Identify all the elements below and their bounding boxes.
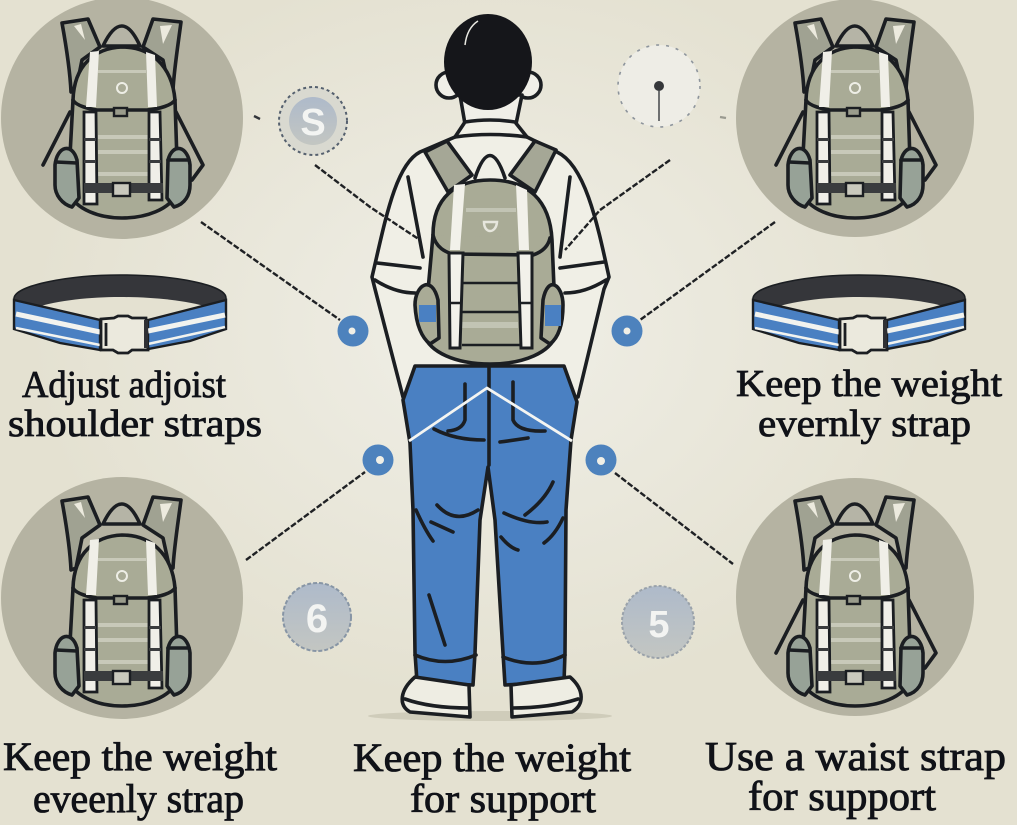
- marker: upper left dot: [338, 316, 368, 346]
- connector: bottom left: [246, 472, 365, 560]
- text: use a waist strap: [705, 733, 1006, 819]
- connector: dial to pack: [565, 160, 670, 250]
- text: adjust shoulder straps: shoulder straps: [8, 403, 262, 445]
- badge: 5: [622, 586, 694, 658]
- badge: 5: 5: [648, 604, 670, 646]
- marker: lower left dot: [362, 444, 394, 476]
- connector: bottom right: [615, 473, 733, 564]
- text: keep the weight, bottom left: [3, 734, 277, 821]
- panel: top right backpack: [736, 0, 974, 237]
- trousers: [403, 366, 577, 685]
- icon: right belt: [753, 275, 965, 353]
- badge: 6: 6: [306, 597, 328, 641]
- badge: S: S: [300, 102, 326, 144]
- neck and ears: [436, 72, 541, 124]
- panel: bottom right backpack: [736, 478, 974, 716]
- text: keep the weight, bottom center: Keep the weight: [353, 735, 631, 780]
- figure: man seen from behind: [368, 14, 612, 721]
- text: keep the weight, bottom center: [353, 735, 631, 821]
- tick: left of S badge: [254, 116, 260, 119]
- shadow: [368, 711, 612, 721]
- text: keep the weight, upper right: evernly strap: [758, 403, 971, 445]
- badge: S: [279, 87, 347, 155]
- connector: S badge to pack: [315, 165, 420, 240]
- panel: top left backpack: [1, 0, 243, 239]
- marker: lower right dot: [586, 444, 616, 476]
- text: adjust shoulder straps: Adjust adjoist: [22, 364, 226, 406]
- connector: top left: [201, 222, 340, 320]
- tick: right of dial: [720, 117, 726, 118]
- marker: upper right dot: [612, 316, 642, 346]
- text: keep the weight, bottom left: Keep the weight: [3, 734, 277, 779]
- text: keep the weight, upper right: [736, 363, 1002, 445]
- trouser details: [409, 365, 572, 663]
- connector: top right: [640, 222, 775, 320]
- icon: left belt: [14, 275, 226, 353]
- shirt: [372, 120, 609, 397]
- text: use a waist strap: Use a waist strap: [705, 733, 1006, 779]
- text: keep the weight, bottom center: for support: [410, 776, 596, 821]
- panel: bottom left backpack: [1, 477, 243, 719]
- badge: clock dial: [618, 45, 700, 127]
- text: use a waist strap: for support: [748, 773, 937, 819]
- text: adjust shoulder straps: [8, 364, 262, 445]
- shoes: [402, 677, 581, 717]
- badge: 6: [283, 583, 351, 651]
- text: keep the weight, bottom left: eveenly strap: [33, 776, 244, 821]
- text: keep the weight, upper right: Keep the weight: [736, 363, 1002, 405]
- backpack on wearer: [415, 141, 563, 364]
- shirt details: [375, 134, 606, 293]
- hair: [444, 14, 532, 110]
